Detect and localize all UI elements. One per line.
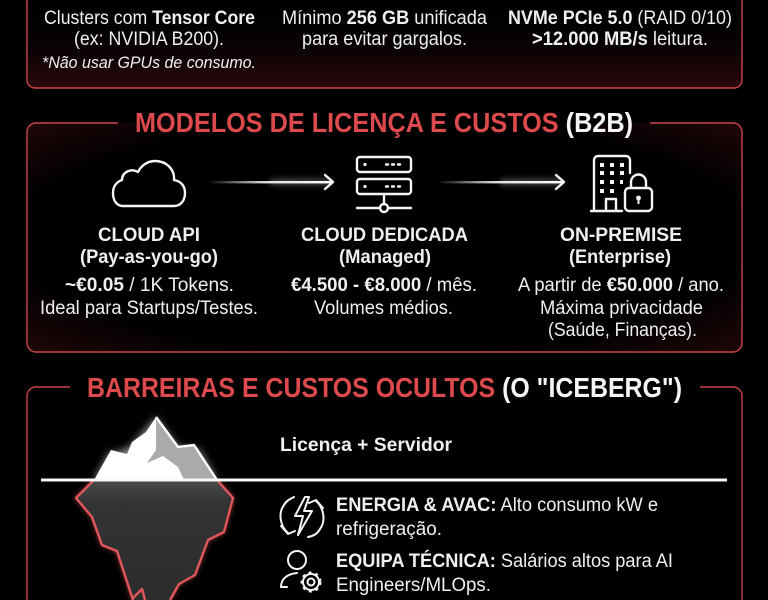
text: cloud api column: CLOUD API [98, 225, 200, 246]
text: energy cost: refrigeração. [336, 519, 442, 540]
text: team cost: EQUIPA TÉCNICA: Salários altos para AI [336, 550, 673, 572]
text: on-premise column: (Saúde, Finanças). [548, 320, 697, 341]
icon: server [357, 157, 411, 212]
text: on-premise column: ON-PREMISE [560, 225, 682, 246]
panel: hidden costs [27, 372, 742, 600]
text: storage column [508, 8, 732, 50]
heading: hidden costs: BARREIRAS E CUSTOS OCULTOS (O "ICEBERG") [87, 372, 682, 403]
text: dedicated cloud column: CLOUD DEDICADA [301, 225, 468, 246]
text: dedicated cloud column: Volumes médios. [314, 298, 453, 319]
text: memory column: para evitar gargalos. [302, 29, 467, 50]
text: processing column: Clusters com Tensor Core [44, 8, 255, 29]
icon: energy cycle [281, 497, 323, 537]
waterline [41, 478, 727, 482]
text: memory column [282, 8, 487, 50]
text: visible costs: Licença + Servidor [280, 435, 453, 456]
arrow: dedicated to on-premise [437, 175, 564, 189]
arrow: cloud api to dedicated [208, 175, 333, 189]
heading: license models: MODELOS DE LICENÇA E CUSTOS (B2B) [135, 107, 633, 138]
illustration: iceberg [76, 417, 233, 600]
text: cloud api column: (Pay-as-you-go) [80, 247, 218, 268]
panel: hardware requirements [27, 0, 742, 88]
text: team cost [336, 550, 673, 596]
icon: building with padlock [591, 156, 652, 211]
icon: person with gear [281, 551, 320, 592]
text: processing column: (ex: NVIDIA B200). [74, 29, 224, 50]
text: cloud api column [40, 225, 258, 319]
text: processing column: *Não usar GPUs de consumo. [42, 53, 256, 72]
text: cloud api column: Ideal para Startups/Testes. [40, 298, 258, 319]
text: dedicated cloud column: €4.500 - €8.000 / mês. [291, 275, 477, 296]
text: storage column: NVMe PCIe 5.0 (RAID 0/10) [508, 8, 732, 29]
text: energy cost [336, 495, 658, 540]
icon: cloud [113, 161, 185, 206]
text: on-premise column [518, 225, 724, 341]
text: storage column: >12.000 MB/s leitura. [532, 29, 708, 50]
text: on-premise column: A partir de €50.000 / ano. [518, 275, 724, 296]
text: processing column [42, 8, 256, 72]
text: on-premise column: Máxima privacidade [540, 298, 703, 319]
text: on-premise column: (Enterprise) [569, 247, 671, 268]
text: dedicated cloud column [291, 225, 477, 319]
text: memory column: Mínimo 256 GB unificada [282, 8, 487, 29]
text: dedicated cloud column: (Managed) [339, 247, 431, 268]
text: team cost: Engineers/MLOps. [336, 575, 491, 596]
panel: license models [27, 107, 742, 352]
text: energy cost: ENERGIA & AVAC: Alto consumo kW e [336, 495, 658, 516]
text: cloud api column: ~€0.05 / 1K Tokens. [65, 275, 234, 296]
